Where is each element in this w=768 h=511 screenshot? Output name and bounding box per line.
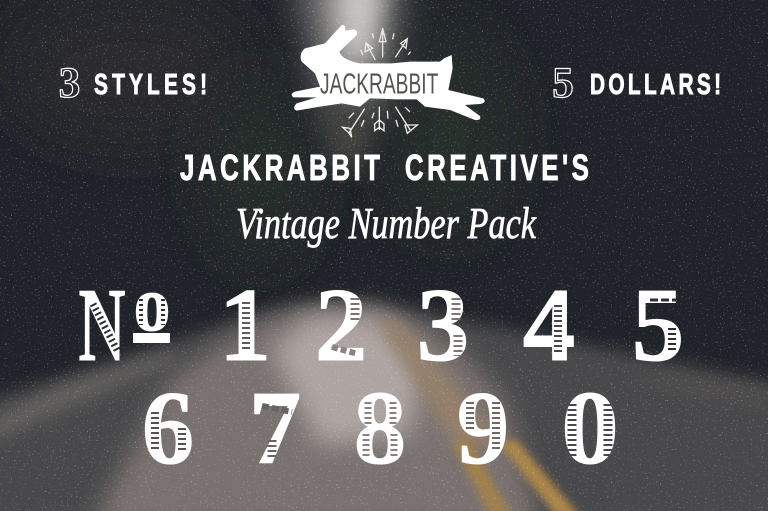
- text: 5 dollars: 5: [552, 60, 574, 107]
- digit 7: 7: [249, 369, 301, 486]
- rabbit silhouette: [292, 25, 485, 120]
- numero sign: o: [134, 260, 170, 347]
- arrows above: [361, 28, 411, 60]
- numero sign: N: [78, 266, 126, 383]
- digit 0: 0: [561, 369, 619, 486]
- digit 4: 4: [523, 266, 575, 383]
- number row one: [78, 260, 684, 383]
- digit 5: 5: [632, 266, 684, 383]
- digit 9: 9: [457, 369, 509, 486]
- text: 3 styles: STYLES!: [94, 69, 207, 101]
- subtitle: Vintage Number Pack: Vintage Number Pack: [236, 199, 537, 248]
- digit 3: 3: [417, 266, 469, 383]
- digit 8: 8: [354, 369, 406, 486]
- number row two: [142, 369, 619, 486]
- digit 2: 2: [315, 266, 367, 383]
- text: 3 styles: [59, 60, 207, 107]
- arrows below: [343, 107, 417, 137]
- heading: Jackrabbit Creative's: JACKRABBIT CREATIVE'S: [180, 148, 589, 188]
- digit 1: 1: [219, 266, 271, 383]
- digit 6: 6: [142, 369, 194, 486]
- text: 5 dollars: DOLLARS!: [590, 69, 721, 101]
- logo: Jackrabbit: [292, 25, 485, 137]
- text: 5 dollars: [552, 60, 721, 107]
- logo wordmark: JACKRABBIT: [320, 68, 438, 100]
- text: 3 styles: 3: [59, 60, 80, 107]
